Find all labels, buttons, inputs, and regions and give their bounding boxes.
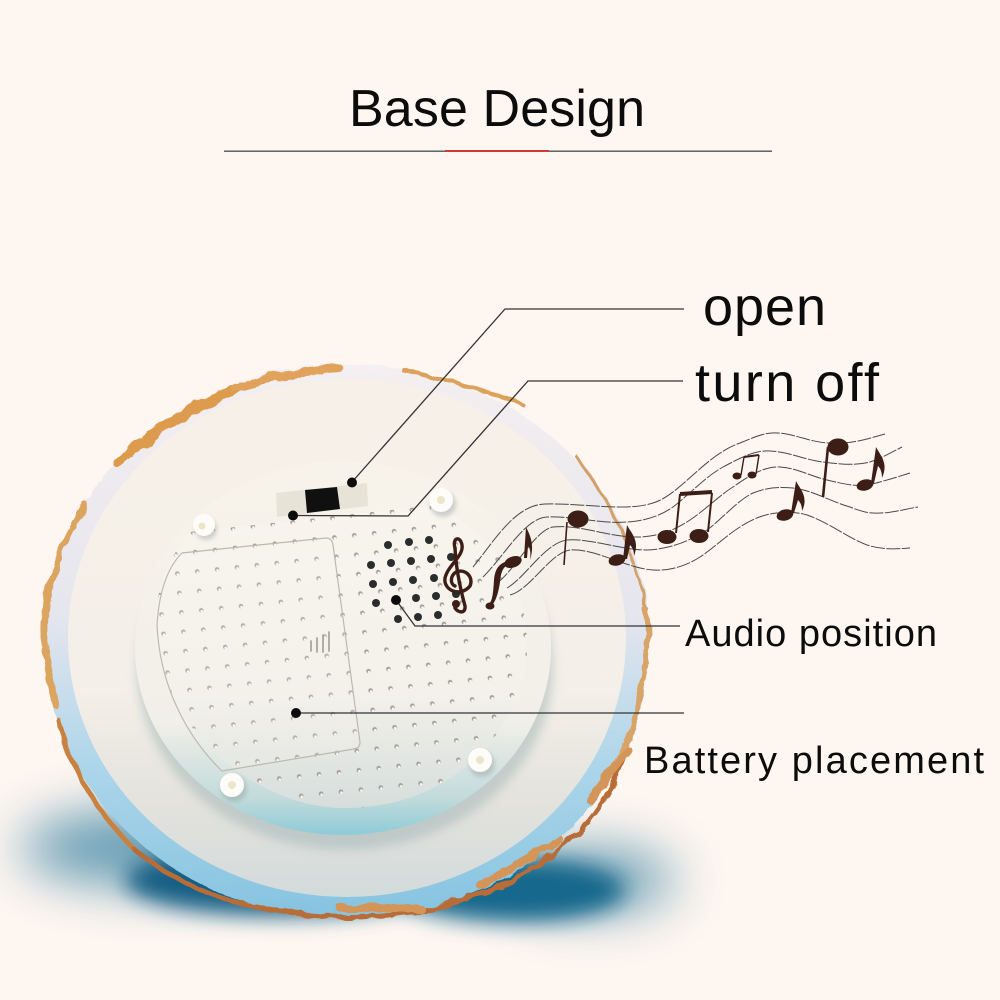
battery cover	[157, 538, 360, 771]
callout: audio position	[391, 595, 937, 655]
sixteenth note 1	[607, 525, 636, 568]
sound wave mark	[311, 632, 329, 652]
mounting pegs	[193, 488, 495, 802]
callout: battery placement: Battery placement	[644, 740, 984, 782]
cast shadow	[20, 810, 675, 922]
music notes	[445, 438, 885, 612]
speaker board	[155, 505, 527, 808]
small beamed notes	[732, 455, 759, 480]
treble clef	[445, 539, 471, 612]
callout: open	[347, 277, 826, 488]
outer rim	[44, 364, 650, 918]
title: Base Design	[349, 80, 645, 138]
sixteenth note 2	[775, 481, 805, 523]
staff lines	[473, 433, 918, 595]
plate inner shading	[137, 486, 553, 850]
f-shaped note	[486, 527, 532, 610]
beamed notes	[658, 492, 712, 544]
music staff with notes	[445, 433, 918, 612]
raised ring	[135, 461, 551, 835]
callout: turn off	[288, 353, 880, 520]
outer plate	[68, 379, 626, 897]
title underline	[224, 150, 772, 152]
callout: open: open	[703, 277, 826, 337]
callout: turn off: turn off	[695, 353, 880, 413]
callout: audio position: Audio position	[685, 613, 937, 655]
callout: battery placement	[291, 708, 984, 782]
gold rim edge	[44, 369, 648, 917]
sixteenth note 3	[855, 447, 885, 493]
speaker holes	[367, 536, 460, 623]
large note 2	[823, 438, 848, 497]
music box base	[44, 364, 650, 918]
power switch	[276, 483, 368, 517]
large note 1	[564, 510, 588, 565]
